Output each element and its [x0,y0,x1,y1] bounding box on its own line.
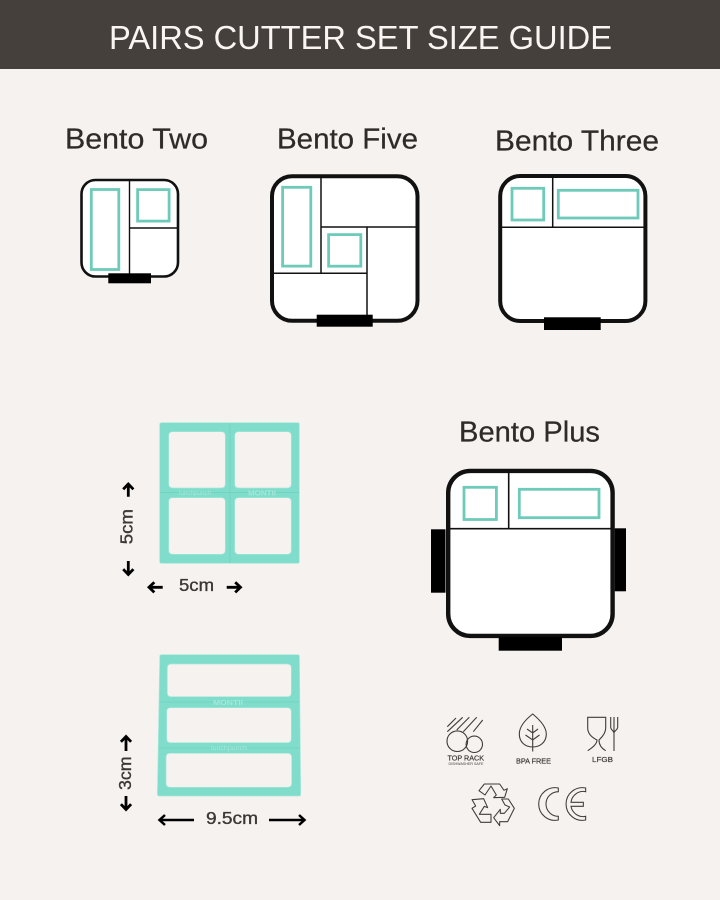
dimension: 9.5cm width [160,808,304,828]
diagram: Bento Three [500,175,646,330]
dimension: 3cm height [115,736,135,810]
dimension: 5cm height: 5cm [116,509,136,544]
icon: top rack dishwasher safe [447,717,484,766]
cutter: four-square template [160,423,299,563]
cutter: three-bar template [157,655,301,796]
title banner: PAIRS CUTTER SET SIZE GUIDE [109,20,612,57]
diagram: Bento Five [272,175,418,327]
icon: top rack dishwasher safe: DISHWASHER SAFE [448,762,484,766]
icon: LFGB food safe: LFGB [592,757,613,764]
title banner [0,0,720,69]
cutter: three-bar template: lunchpunch [211,745,247,752]
dimension: 3cm height: 3cm [115,756,135,790]
dimension: 5cm height [116,484,136,574]
heading: Bento Three: Bento Three [495,126,659,158]
icon: CE mark [539,788,586,820]
cutter: four-square template: lunchpunch [179,490,211,497]
dimension: 5cm width [149,575,240,595]
icon: recycling symbol [472,784,514,826]
cutter: four-square template: MONTII [248,490,276,498]
heading: Bento Two: Bento Two [65,124,208,156]
icon: top rack dishwasher safe: TOP RACK [448,756,484,762]
heading: Bento Five: Bento Five [277,124,418,156]
dimension: 5cm width: 5cm [179,575,214,595]
icon: BPA free leaf: BPA FREE [516,758,551,766]
icon: LFGB food safe [588,717,618,764]
dimension: 9.5cm width: 9.5cm [206,808,258,828]
diagram: Bento Two [82,179,179,283]
icon: BPA free leaf [516,714,551,766]
cutter: three-bar template: MONTII [213,700,243,707]
diagram: Bento Plus [431,470,626,651]
heading: Bento Plus: Bento Plus [459,416,600,448]
